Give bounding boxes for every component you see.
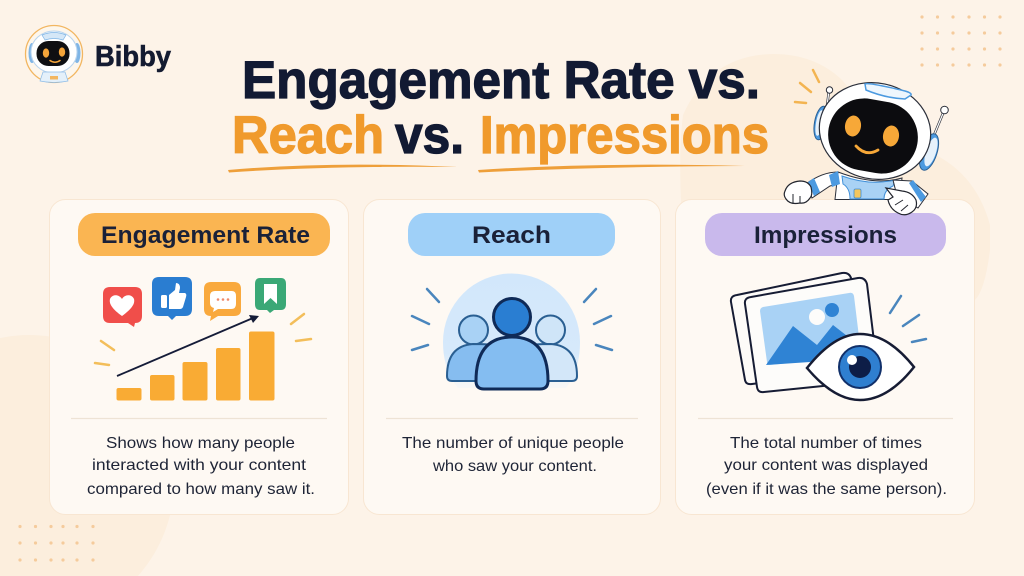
panel: Engagement Rate (50, 200, 348, 514)
text: Engagement Rate description (87, 435, 315, 498)
title line 2: Reach (232, 106, 384, 165)
icon: image cards with eye (731, 273, 926, 400)
person left (447, 316, 500, 381)
picture (760, 293, 860, 365)
title line 1: Engagement Rate vs. (242, 51, 760, 110)
head (810, 72, 940, 190)
arm left (806, 171, 840, 198)
bars (116, 332, 274, 400)
person right (524, 316, 577, 381)
title (228, 51, 769, 172)
back card (731, 273, 868, 384)
attention sparks (795, 70, 819, 103)
chart: rising engagement bars with social icons (95, 277, 311, 400)
text: Engagement Rate description: Shows how many people (106, 435, 295, 452)
sparks (95, 314, 311, 365)
torso chest plate (842, 176, 895, 199)
heading pill: Engagement Rate: Engagement Rate (101, 222, 310, 249)
visor (822, 93, 924, 179)
hand right (886, 188, 916, 215)
arrow: upward trend (117, 315, 259, 376)
icon: chat bubble (204, 282, 241, 321)
eye (807, 334, 914, 400)
panel: Reach (364, 200, 660, 514)
text: Reach description: who saw your content. (432, 458, 597, 475)
icon: Bibby robot badge (26, 26, 82, 82)
front card (745, 278, 878, 392)
icon: thumbs up bubble (152, 277, 192, 320)
eye left (844, 114, 862, 138)
arm right (893, 180, 928, 208)
icon: group of people (412, 274, 612, 389)
mascot: Bibby robot (784, 70, 948, 215)
heading pill: Reach: Reach (472, 222, 551, 249)
hand left (784, 181, 812, 204)
icon: bookmark bubble (255, 278, 286, 313)
text: Engagement Rate description: interacted with your content (92, 457, 307, 474)
logo wordmark: Bibby (95, 41, 171, 73)
panel: Impressions (676, 200, 974, 514)
logo: Bibby (26, 26, 171, 82)
title line 2: Impressions (480, 106, 769, 165)
antenna left (826, 87, 833, 115)
text: Impressions description (706, 435, 947, 498)
text: Reach description (402, 435, 624, 475)
smile (856, 146, 878, 153)
sparks (412, 289, 612, 350)
title underlines (228, 165, 745, 172)
ear right (916, 131, 942, 173)
text: Impressions description: your content was displayed (724, 457, 928, 474)
head panel (865, 84, 911, 99)
antenna right (932, 106, 948, 140)
icon: heart bubble (103, 287, 142, 327)
eye right (882, 124, 900, 148)
text: Reach description: The number of unique people (402, 435, 624, 452)
text: Impressions description: (even if it was the same person). (706, 481, 947, 498)
ear left (812, 105, 830, 141)
heading pill: Impressions (705, 213, 946, 256)
heading pill: Engagement Rate (78, 213, 330, 256)
torso (835, 172, 902, 200)
title line 2: vs. (395, 106, 464, 165)
text: Impressions description: The total number of times (730, 435, 922, 452)
person center (476, 298, 548, 389)
heading pill: Impressions: Impressions (754, 222, 897, 249)
sparks (890, 296, 926, 342)
heading pill: Reach (408, 213, 615, 256)
text: Engagement Rate description: compared to how many saw it. (87, 481, 315, 498)
